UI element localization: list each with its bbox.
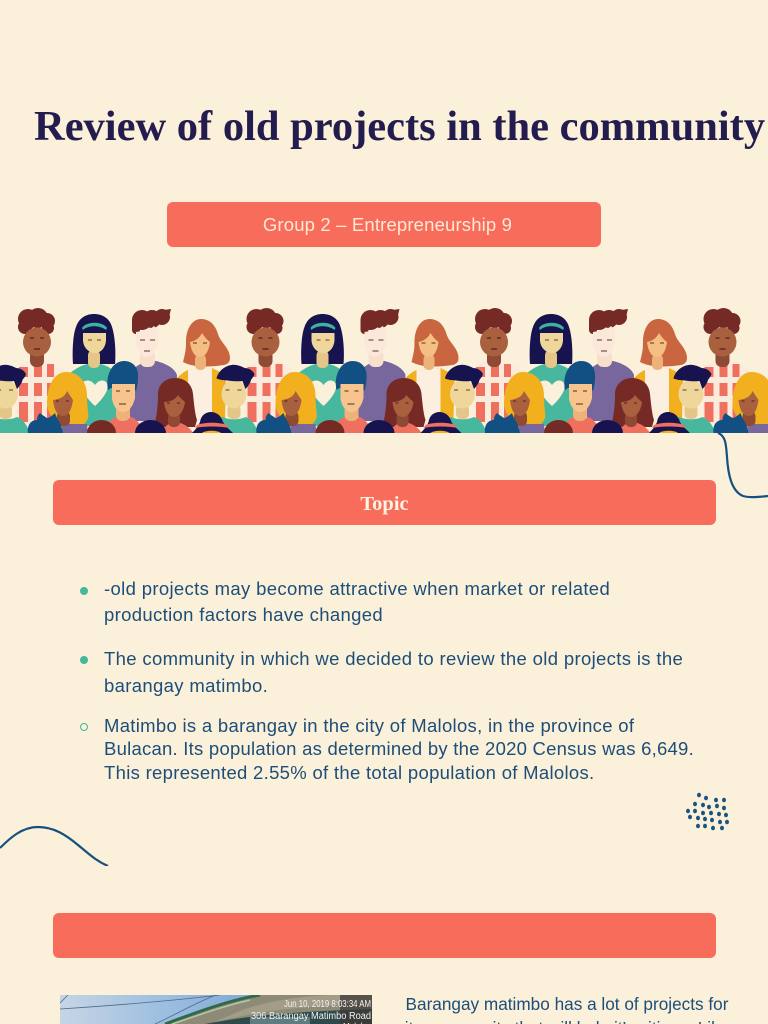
topic banner: Topic	[360, 493, 409, 515]
back row of people	[14, 308, 750, 426]
paragraph	[405, 994, 729, 1024]
illustration: crowd of people	[0, 308, 768, 433]
bullet 2 text: barangay matimbo.	[104, 675, 268, 696]
bullet 3 text: This represented 2.55% of the total population of Malolos.	[104, 762, 594, 783]
subtitle banner	[167, 202, 601, 247]
decorative curve: right	[718, 433, 768, 498]
foreground heads and hats	[28, 412, 768, 446]
decorative curve: left	[0, 826, 108, 866]
bullet 3 text: Bulacan. Its population as determined by the 2020 Census was 6,649.	[104, 738, 694, 759]
paragraph: Barangay matimbo has a lot of projects for	[406, 994, 728, 1014]
bullet 1 marker	[80, 587, 88, 595]
bullet 3 text	[104, 715, 694, 783]
front row of people	[0, 361, 768, 433]
photo timestamp	[251, 999, 371, 1024]
decorative dot pattern	[686, 792, 729, 830]
second banner	[53, 913, 716, 958]
bullet 1 text	[104, 578, 610, 625]
title: Review of old projects in the community	[34, 103, 765, 150]
bullet list	[80, 578, 694, 783]
topic banner	[53, 480, 716, 525]
bullet 1 text: production factors have changed	[104, 604, 383, 625]
bullet 1 text: -old projects may become attractive when market or related	[104, 578, 610, 599]
photo of barangay road	[60, 995, 372, 1024]
bullet 2 text	[104, 648, 683, 696]
bullet 2 marker	[80, 656, 88, 664]
subtitle banner: Group 2 – Entrepreneurship 9	[263, 214, 512, 235]
bullet 3 marker	[80, 723, 88, 731]
bullet 2 text: The community in which we decided to review the old projects is the	[104, 648, 683, 669]
bullet 3 text: Matimbo is a barangay in the city of Malolos, in the province of	[104, 715, 634, 736]
